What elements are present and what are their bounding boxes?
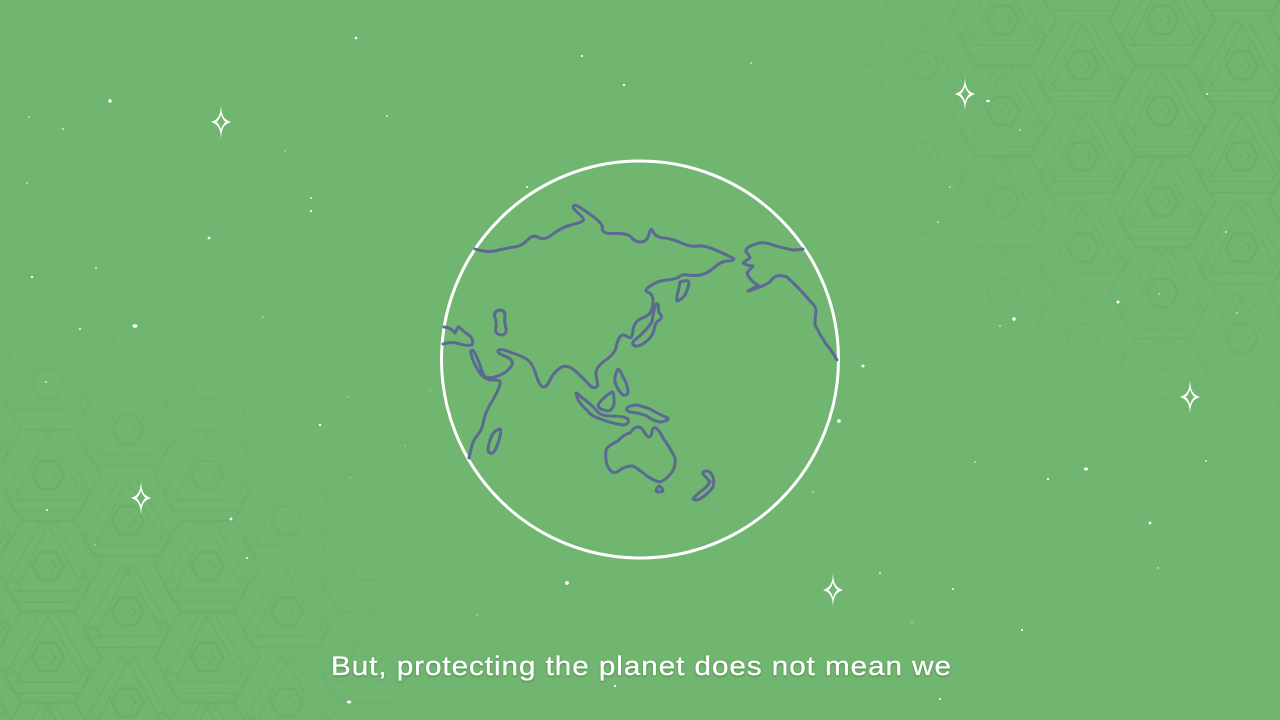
Madagascar bbox=[488, 429, 501, 453]
globe outline bbox=[442, 161, 838, 558]
Sakhalin bbox=[677, 281, 689, 301]
New Zealand bbox=[693, 471, 714, 500]
sparkle star right bbox=[1180, 380, 1200, 414]
sparkle star top right bbox=[955, 77, 975, 111]
globe bbox=[442, 161, 838, 558]
Australia bbox=[606, 427, 675, 482]
sparkle star top left bbox=[211, 105, 231, 139]
Japan bbox=[633, 304, 662, 346]
sparkle star lower left bbox=[131, 481, 151, 515]
continents bbox=[443, 205, 837, 500]
Sumatra and Java bbox=[576, 393, 628, 425]
Mediterranean coast bbox=[443, 327, 473, 345]
Eurasia and Africa coast bbox=[469, 205, 734, 458]
sparkle star lower centre bbox=[823, 573, 843, 607]
caption: But, protecting the planet does not mean we bbox=[331, 651, 951, 681]
New Guinea bbox=[627, 405, 668, 422]
Alaska and western North America bbox=[743, 243, 837, 360]
Caspian Sea bbox=[494, 310, 506, 335]
Philippines bbox=[615, 369, 628, 395]
Tasmania bbox=[656, 486, 663, 492]
Borneo bbox=[598, 392, 614, 411]
